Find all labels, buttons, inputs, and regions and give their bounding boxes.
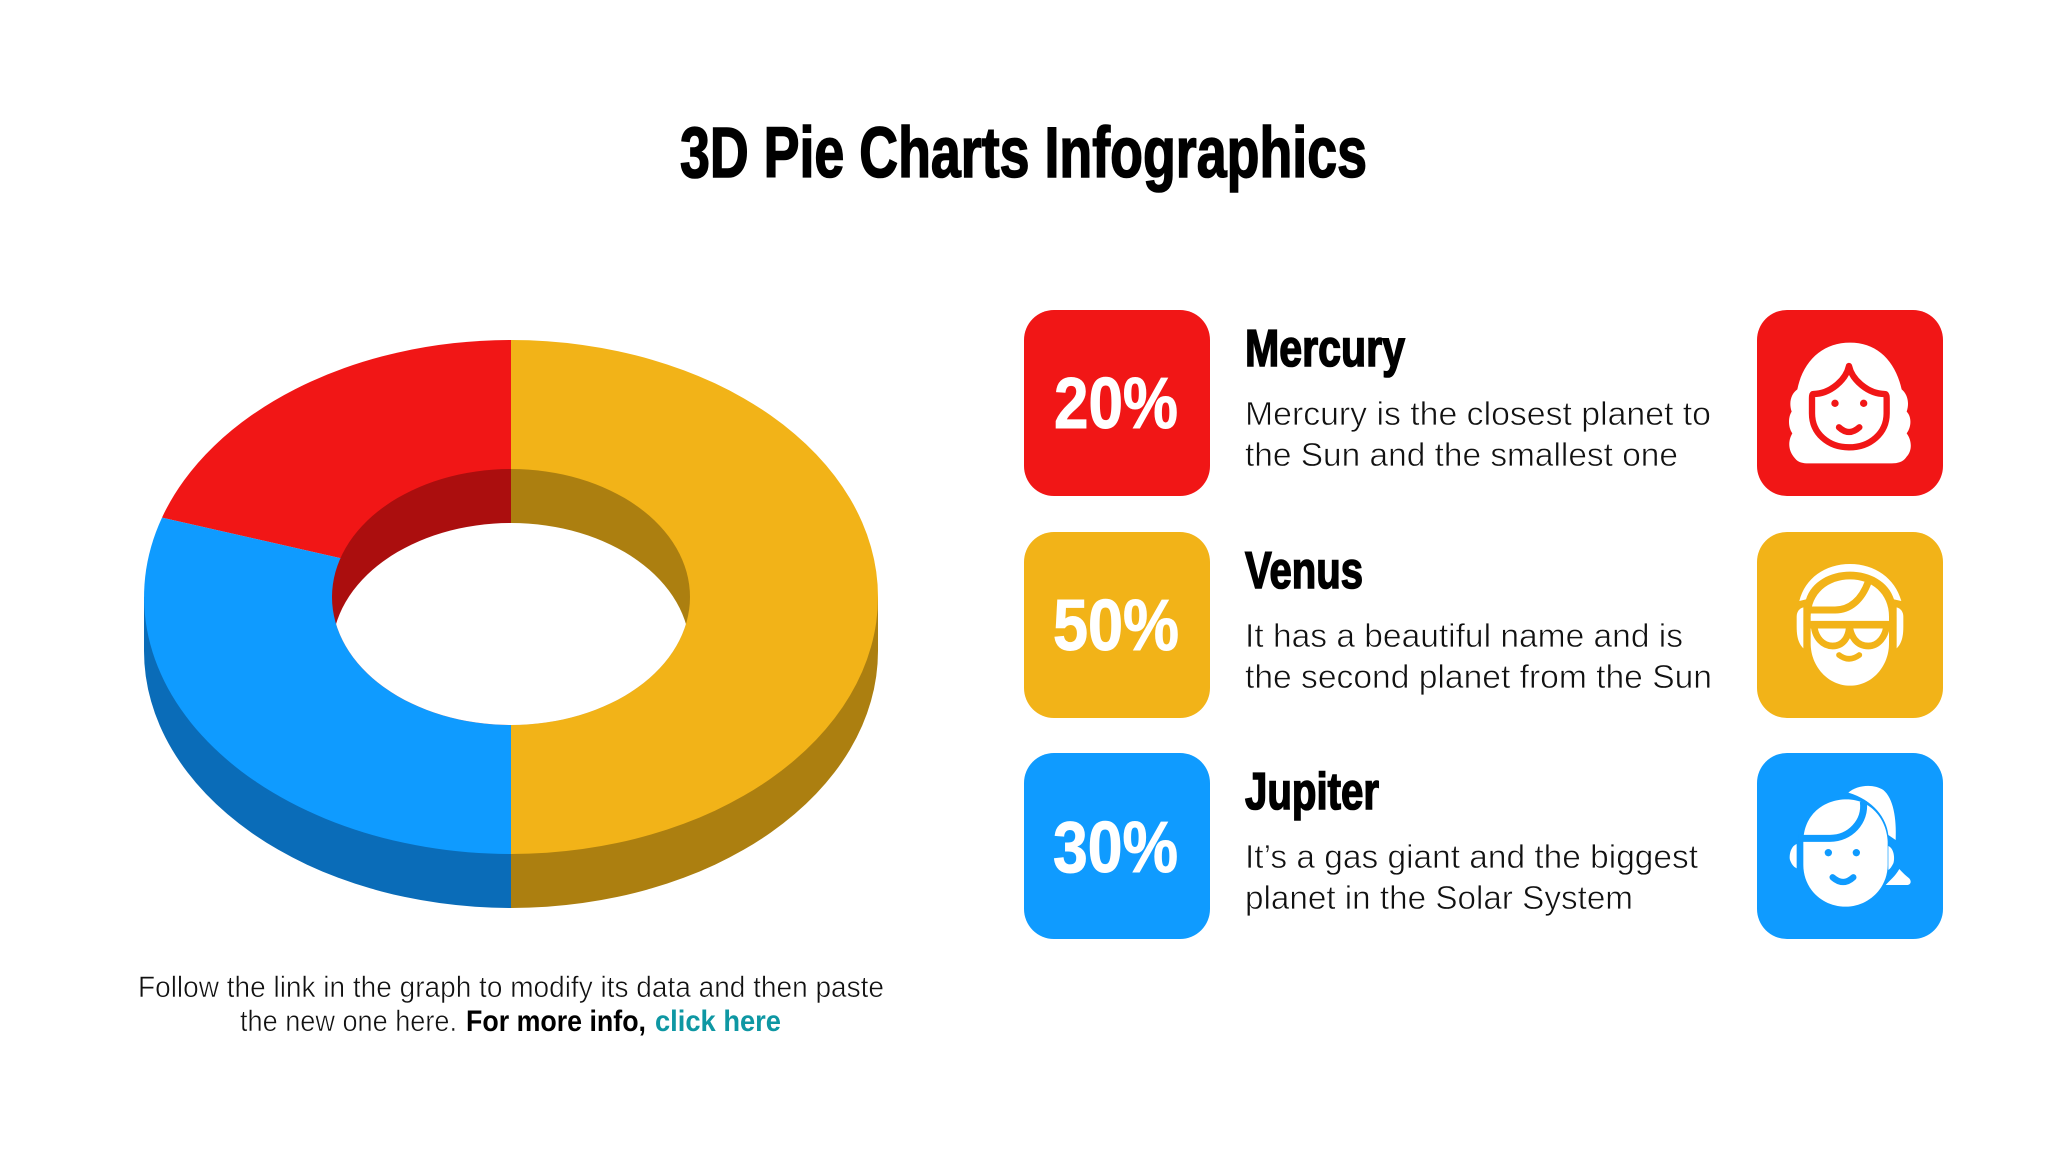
- description: Venus: the second planet from the Sun: [1245, 659, 1712, 696]
- inner wall: red: [332, 469, 511, 725]
- 3D donut chart: [144, 340, 878, 908]
- description: Jupiter: [1245, 839, 1699, 917]
- description: Mercury: Mercury is the closest planet to: [1245, 396, 1711, 433]
- icon: person with headphones and glasses: [1757, 532, 1943, 718]
- heading: Mercury: Mercury: [1245, 320, 1405, 378]
- percent badge: 20%: 20%: [1054, 364, 1178, 444]
- top face: red 20%: [162, 340, 511, 597]
- description: Mercury: [1245, 396, 1711, 474]
- extruded side: blue: [144, 597, 511, 908]
- percent badge: 50%: [1024, 532, 1210, 718]
- inner wall: gold: [511, 469, 690, 725]
- percent badge: 20%: [1024, 310, 1210, 496]
- heading: Venus: Venus: [1245, 542, 1363, 600]
- title: 3D Pie Charts Infographics: [680, 114, 1367, 193]
- heading: Jupiter: Jupiter: [1245, 763, 1379, 821]
- description: Venus: [1245, 618, 1712, 696]
- footnote text: the new one here.: [240, 1005, 457, 1038]
- percent badge: 30%: [1024, 753, 1210, 939]
- row: Mercury: [1024, 310, 1943, 496]
- donut hole: [336, 523, 686, 725]
- description: Jupiter: It’s a gas giant and the biggest: [1245, 839, 1699, 876]
- description: Jupiter: planet in the Solar System: [1245, 880, 1633, 917]
- icon: person with ponytail: [1757, 753, 1943, 939]
- percent badge: 50%: 50%: [1053, 586, 1179, 666]
- row: Venus: [1024, 532, 1943, 718]
- top face: blue 30%: [144, 518, 511, 854]
- description: Venus: It has a beautiful name and is: [1245, 618, 1683, 655]
- row: Jupiter: [1024, 753, 1943, 939]
- footnote text: For more info,: [466, 1005, 646, 1038]
- footnote text: click here: [655, 1005, 781, 1038]
- percent badge: 30%: 30%: [1053, 808, 1178, 888]
- top face: gold 50%: [511, 340, 878, 854]
- extruded side: gold: [511, 597, 878, 908]
- icon: woman with curly hair: [1757, 310, 1943, 496]
- description: Mercury: the Sun and the smallest one: [1245, 437, 1678, 474]
- footnote text: Follow the link in the graph to modify its data and then paste: [138, 971, 884, 1004]
- footnote text: [138, 971, 884, 1038]
